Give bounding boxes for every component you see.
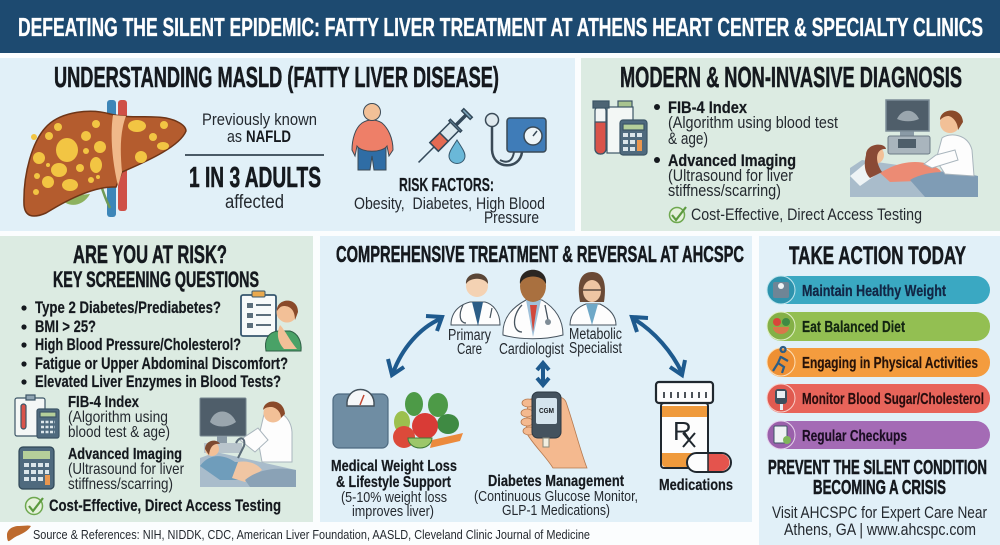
text: previously known: Previously known [202,110,317,129]
list: screening questions: Elevated Liver Enzymes in Blood Tests? [35,373,281,391]
text: advanced imaging: stiffness/scarring) [668,182,781,200]
list: screening questions [21,299,288,391]
text: advanced imaging: Advanced Imaging [668,152,796,170]
text: risk factors [354,175,545,227]
text: cost-effective: Cost-Effective, Direct Access Testing [691,205,922,224]
arrow: team to diabetes [537,363,549,385]
icon: fatty liver [24,100,186,217]
text: previously known [202,110,317,146]
icon: syringe [413,107,474,168]
text: weight loss: (5-10% weight loss [341,489,447,506]
text: FIB-4 index: FIB-4 Index [68,394,139,411]
stat: 1 in 3 adults [189,162,321,213]
text: risk factors: Pressure [484,209,539,227]
text: cost-effective: Cost-Effective, Direct Access Testing [49,496,281,515]
panel: understanding MASLD [0,58,575,231]
icon: obesity figure [352,104,393,170]
icon: pill bottle: R [673,416,692,446]
labels: care team [448,326,623,358]
illustration: ultrasound scan [850,100,978,197]
icon: small liver [7,526,31,541]
text: advanced imaging [68,446,185,493]
list: screening questions: Type 2 Diabetes/Prediabetes? [35,299,221,317]
icon: glucose monitor in hand [521,392,587,468]
text: diabetes management: (Continuous Glucose Monitor, [474,488,638,505]
text: previously known: as [227,127,242,146]
icon: glucose monitor in hand: CGM [539,408,554,415]
arrow: team to medications [632,317,685,375]
text: advanced imaging [654,152,796,200]
text: FIB-4 index: (Algorithm using [68,409,168,426]
icon: calculator [19,447,54,489]
labels: care team: Specialist [569,340,623,357]
text: FIB-4 index: & age) [668,130,708,148]
text: diabetes management: GLP-1 Medications) [502,502,610,519]
action: eat balanced diet: Eat Balanced Diet [802,319,906,336]
text: advanced imaging: Advanced Imaging [68,446,182,463]
heading: are you at risk: ARE YOU AT RISK? [73,241,227,269]
stat: 1 in 3 adults: affected [225,192,284,213]
action: eat balanced diet [767,312,990,341]
list: screening questions: BMI > 25? [35,318,96,336]
icon: weight scale [333,390,388,448]
icon: primary care doctor [451,274,500,326]
callout: prevent the silent condition [768,457,987,499]
stat: 1 in 3 adults: 1 IN 3 ADULTS [189,162,321,194]
text: medications: Medications [659,477,733,494]
icon: pill bottle [656,382,731,472]
action: maintain healthy weight: Maintain Healthy Weight [802,283,947,300]
panel: treatment [320,236,752,522]
icon: cardiologist [503,270,563,339]
icon: clipboard and calculator [15,395,59,438]
panel: take action [759,236,1000,545]
text: weight loss: improves liver) [352,503,434,520]
action: maintain healthy weight [767,276,990,304]
icon: lab tube and calculator [593,101,647,155]
action: physical activities [767,347,990,377]
heading: understanding MASLD: UNDERSTANDING MASLD (FATTY LIVER DISEASE) [54,62,499,94]
icon: metabolic specialist [570,272,616,325]
illustration: liver ultrasound [200,398,296,487]
text: risk factors: RISK FACTORS: [399,175,494,195]
labels: care team: Cardiologist [499,341,565,358]
text: weight loss: & Lifestyle Support [336,474,451,491]
arrow: team to weight loss [388,316,442,375]
action: regular checkups [767,421,990,449]
text: FIB-4 index: (Algorithm using blood test [668,114,838,132]
list: screening questions: Fatigue or Upper Abdominal Discomfort? [35,355,288,373]
icon: blood pressure cuff [486,114,546,165]
panel: diagnosis [581,58,1000,231]
text: FIB-4 index: FIB-4 Index [668,99,748,117]
footer: sources: Source & References: NIH, NIDDK, CDC, American Liver Foundation, AASLD, Cleveland Clinic Journal of Medicine [33,527,590,542]
text: diabetes management [474,473,638,519]
header banner [0,0,1000,53]
text: advanced imaging: (Ultrasound for liver [668,167,793,185]
text: risk factors: Obesity, Diabetes, High Blood [354,195,545,213]
text: diabetes management: Diabetes Management [488,473,624,490]
subheading: screening questions: KEY SCREENING QUESTIONS [53,267,259,292]
icon: checklist and thinking person [241,291,301,351]
list: screening questions: High Blood Pressure/Cholesterol? [35,336,241,354]
heading: treatment: COMPREHENSIVE TREATMENT & REVERSAL AT AHCSPC [336,241,744,267]
panel: are you at risk [0,236,313,522]
icon: check mark [670,207,686,222]
icon: vegetables and fruit [393,392,463,448]
text: FIB-4 index [68,394,170,441]
text: visit AHCSPC [772,503,987,539]
icon: blood drop [449,140,465,164]
action: regular checkups: Regular Checkups [802,428,907,445]
icon: check mark [26,498,43,514]
text: FIB-4 index: blood test & age) [68,424,170,441]
text: advanced imaging: (Ultrasound for liver [68,461,185,478]
text: FIB-4 index [654,99,838,148]
action: monitor blood sugar [767,384,990,413]
text: weight loss: Medical Weight Loss [331,458,457,475]
labels: care team: Metabolic [569,326,622,343]
text: previously known: NAFLD [246,127,291,146]
text: weight loss [331,458,457,520]
text: advanced imaging: stiffness/scarring) [68,476,173,493]
labels: care team: Primary [448,327,491,344]
labels: care team: Care [457,341,482,358]
